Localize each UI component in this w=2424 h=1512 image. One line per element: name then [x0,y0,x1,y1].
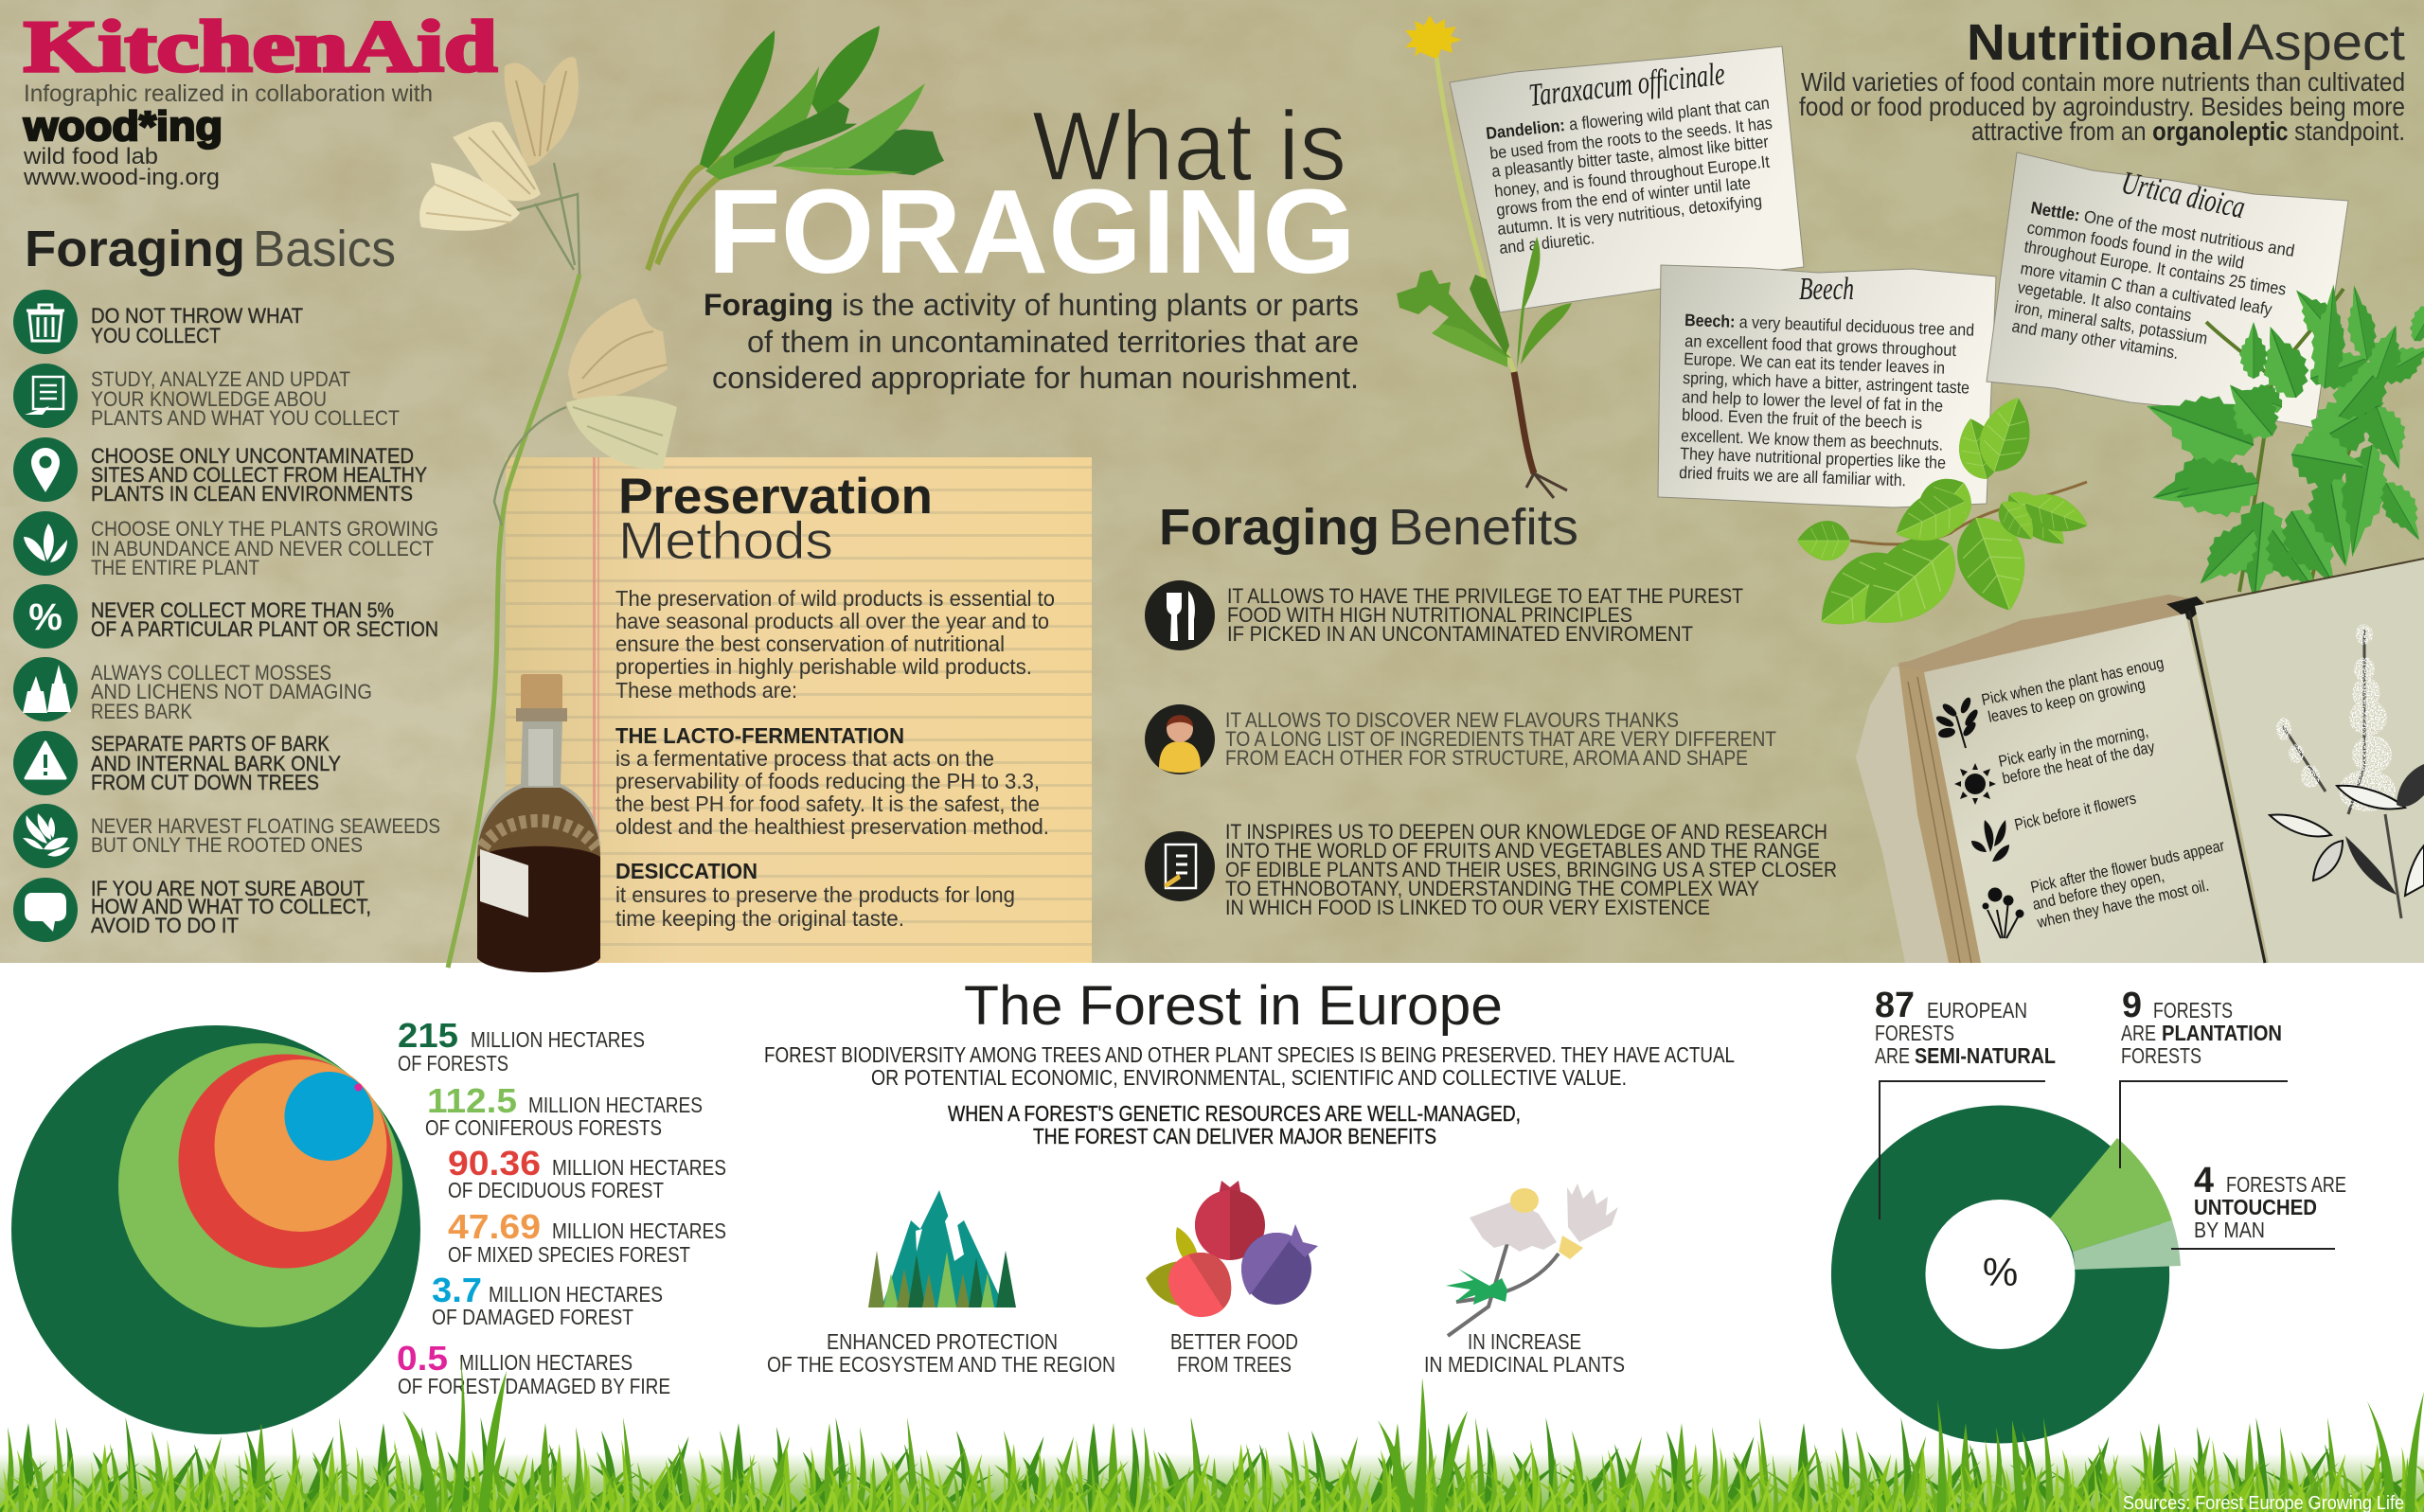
collaboration credit: www.wood-ing.org [23,165,220,190]
donut label: 9: 9 [2122,986,2142,1025]
rule 1: DO NOT THROW WHAT [91,304,303,328]
donut label: 9: FORESTS [2121,1043,2201,1068]
label: 47.69: 47.69 [448,1207,541,1246]
label: 112.5: OF CONIFEROUS FORESTS [425,1115,662,1140]
text: forest intro: WHEN A FOREST'S GENETIC RESOURCES ARE WELL-MANAGED, [948,1101,1521,1126]
icon: map pin [13,437,78,502]
icon: book sun [1954,763,1996,805]
icon: trash bin [13,290,78,354]
icon: seaweed [13,804,78,868]
foraging basics list [13,290,440,942]
label: 90.36: 90.36 [448,1144,541,1183]
icon: mountains and trees [868,1190,1016,1307]
card: Beech: an excellent food that grows throughout [1684,331,1956,360]
label: 3.7 [432,1271,663,1329]
card: Taraxacum officinale: autumn. It is very nutritious, detoxifying [1496,191,1763,239]
card: Taraxacum officinale: a pleasantly bitter taste, almost like bitter [1490,132,1770,181]
rule 8: NEVER HARVEST FLOATING SEAWEEDS [91,814,440,838]
book tip lines: leaves to keep on growing [1987,675,2147,726]
donut chart [1831,1105,2181,1443]
heading: Foraging Benefits [1159,499,1578,556]
label: 0.5: MILLION HECTARES [459,1350,633,1375]
plant: green sprig [648,26,944,270]
donut label: 9 [2120,986,2288,1168]
text: preservation body: The preservation of wild products is essential to [615,586,1055,611]
donut label: 87: 87 [1875,986,1915,1025]
benefit 1 [1227,584,1743,646]
text: forest intro [764,1042,1735,1148]
heading: Preservation Methods [618,469,933,570]
label: 3.7: OF DAMAGED FOREST [432,1305,633,1329]
card: Urtica dioica: common foods found in the wild [2025,218,2245,273]
card: Urtica dioica: vegetable. It also contains [2016,277,2193,325]
benefit 3 [1225,820,1837,919]
rule 5: NEVER COLLECT MORE THAN 5% [91,598,394,622]
heading: Foraging Benefits: Benefits [1388,499,1578,556]
heading: Foraging Benefits: Foraging [1159,499,1380,556]
text: forest intro: OR POTENTIAL ECONOMIC, ENVIRONMENTAL, SCIENTIFIC AND COLLECTIVE VALUE. [871,1065,1627,1090]
card: Urtica dioica: Nettle: One of the most nutritious and [2029,198,2296,260]
plant: nettle [2135,279,2424,605]
heading: Foraging Basics [25,221,396,277]
rule 6: AND LICHENS NOT DAMAGING [91,680,372,703]
card: Beech: Beech [1799,272,1854,307]
card: Beech: spring, which have a bitter, astringent taste [1683,368,1970,398]
benefit 3: IN WHICH FOOD IS LINKED TO OUR VERY EXISTENCE [1225,896,1710,919]
label: 0.5 [397,1339,670,1398]
title: FORAGING [707,165,1356,298]
label: 0.5: OF FOREST DAMAGED BY FIRE [398,1374,670,1398]
rule 3 [91,444,427,506]
captions: forest benefits: BETTER FOOD [1170,1329,1298,1354]
text: preservation body: ensure the best conservation of nutritional [615,631,1005,656]
rule 6: REES BARK [91,700,192,723]
donut chart: % [1983,1250,2018,1294]
image: open book [1856,559,2424,963]
card: Taraxacum officinale: Dandelion: a flowering wild plant that can [1485,94,1771,143]
card: Beech: Europe. We can eat its tender leaves in [1684,349,1945,378]
panel: notebook paper [506,457,1092,963]
icon: fruits [1146,1181,1318,1317]
icon: notes [13,364,78,428]
rule 5: OF A PARTICULAR PLANT OR SECTION [91,617,438,641]
paper background [0,0,2424,963]
icon: warning [13,731,78,795]
label: 0.5: 0.5 [397,1339,448,1378]
rule 8: BUT ONLY THE ROOTED ONES [91,833,363,857]
grass border [0,1356,2424,1512]
label: 112.5: MILLION HECTARES [528,1093,703,1117]
card: Beech: blood. Even the fruit of the beech is [1682,405,1922,433]
rule 8 [91,814,440,857]
text: preservation body: it ensures to preserve the products for long [615,882,1015,907]
text: preservation body: THE LACTO-FERMENTATION [615,723,904,748]
benefit 3: IT INSPIRES US TO DEEPEN OUR KNOWLEDGE OF AND RESEARCH [1225,820,1827,844]
card: Urtica dioica: more vitamin C than a cultivated leafy [2019,258,2273,319]
rule 9 [91,877,371,937]
donut label: 4: FORESTS ARE [2226,1172,2346,1197]
rule 9: HOW AND WHAT TO COLLECT, [91,895,371,918]
rule 4: IN ABUNDANCE AND NEVER COLLECT [91,537,434,560]
collaboration credit: Infographic realized in collaboration with [24,80,433,107]
card: Taraxacum officinale: grows from the end of winter until late [1495,173,1752,220]
heading: Foraging Basics: Basics [253,221,396,277]
icon: percent: % [28,596,62,638]
text: preservation body: These methods are: [615,678,797,703]
label: 112.5: 112.5 [427,1081,517,1120]
benefit 1: IF PICKED IN AN UNCONTAMINATED ENVIROMENT [1227,622,1693,646]
donut label: 9: PLANTATION [2162,1021,2282,1045]
rule 9: AVOID TO DO IT [91,914,239,937]
card: Taraxacum officinale: and a diuretic. [1498,228,1595,258]
card: Beech: dried fruits we are all familiar with. [1679,463,1906,489]
benefits list [1145,580,1837,919]
icon: person [1145,704,1215,774]
rule 7 [91,732,341,794]
rule 4: CHOOSE ONLY THE PLANTS GROWING [91,517,438,541]
collaboration credit [23,80,433,190]
captions: forest benefits: FROM TREES [1177,1352,1292,1377]
captions: forest benefits: ENHANCED PROTECTION [827,1329,1058,1354]
donut label: 87: ARE [1875,1043,1910,1068]
text: preservation body: time keeping the original taste. [615,906,904,931]
heading: Nutritional Aspect [1967,14,2405,71]
text: definition: of them in uncontaminated territories that are [747,325,1359,359]
book tip lines: when they have the most oil. [2035,877,2211,932]
collaboration credit: wild food lab [23,144,158,169]
donut label: 4: UNTOUCHED [2194,1195,2317,1219]
text: preservation body: DESICCATION [615,859,758,883]
card: Taraxacum officinale: Taraxacum officinale [1527,57,1727,114]
rule 2: YOUR KNOWLEDGE ABOU [91,387,327,411]
icon: fork and knife [1145,580,1215,650]
KitchenAid logo: KitchenAid [24,6,497,87]
label: 112.5 [425,1081,703,1140]
label: 90.36: OF DECIDUOUS FOREST [448,1178,664,1202]
rule 6 [91,661,372,723]
text: preservation body: preservability of foods reducing the PH to 3.3, [615,769,1040,793]
icon: percent [13,584,78,649]
donut label: 4: 4 [2194,1161,2214,1201]
donut label: 4: BY MAN [2194,1218,2265,1242]
donut label: 4 [2171,1161,2346,1249]
rule 6: ALWAYS COLLECT MOSSES [91,661,331,685]
card: Beech: They have nutritional properties like the [1680,444,1946,472]
text: preservation body: oldest and the healthiest preservation method. [615,814,1049,839]
rule 3: PLANTS IN CLEAN ENVIRONMENTS [91,482,413,506]
donut label: 87: SEMI-NATURAL [1915,1043,2056,1068]
benefit 2 [1225,708,1776,770]
card: Taraxacum officinale: honey, and is found throughout Europe.It [1493,152,1771,201]
benefit 2: FROM EACH OTHER FOR STRUCTURE, AROMA AND SHAPE [1225,746,1748,770]
label: 47.69 [448,1207,726,1267]
card: Urtica dioica: Urtica dioica [2118,166,2248,225]
text: definition: considered appropriate for human nourishment. [712,361,1359,395]
book tip lines: Pick before it flowers [2013,790,2138,834]
card: Taraxacum officinale [1450,46,1804,312]
label: 215: OF FORESTS [398,1051,508,1076]
heading: Foraging Basics: Foraging [25,221,245,277]
donut label: 87 [1875,986,2056,1219]
rule 1 [91,304,303,347]
title [707,92,1356,298]
text: definition [704,288,1359,395]
rule 4: THE ENTIRE PLANT [91,556,259,579]
captions: forest benefits: IN MEDICINAL PLANTS [1424,1352,1625,1377]
donut label: 9: ARE [2121,1021,2156,1045]
plant: dandelion [1397,15,1572,498]
benefit 3: TO ETHNOBOTANY, UNDERSTANDING THE COMPLEX WAY [1225,877,1759,900]
plant: dried flowers [419,57,677,968]
bubble chart: forests [11,1025,420,1434]
plant: beech branch [1797,390,2094,648]
card: Beech: excellent. We know them as beechnuts. [1681,426,1943,454]
label: 90.36: MILLION HECTARES [552,1155,726,1180]
rule 2 [91,367,400,430]
rule 7: FROM CUT DOWN TREES [91,771,319,794]
icon: document [1145,831,1215,901]
benefit 3: OF EDIBLE PLANTS AND THEIR USES, BRINGING US A STEP CLOSER [1225,858,1837,881]
rule 1: YOU COLLECT [91,324,221,347]
heading: Preservation Methods: Methods [618,510,833,570]
book tip lines: Pick when the plant has enoug [1980,654,2166,709]
rule 7: SEPARATE PARTS OF BARK [91,732,330,756]
card: Beech [1658,265,1996,507]
card: Beech: Beech: a very beautiful deciduous tree and [1684,311,1974,340]
heading: The Forest in Europe: The Forest in Europe [964,975,1503,1037]
benefit 1: IT ALLOWS TO HAVE THE PRIVILEGE TO EAT THE PUREST [1227,584,1743,608]
donut label: 9: FORESTS [2153,998,2233,1023]
captions: forest benefits: IN INCREASE [1468,1329,1581,1354]
captions: forest benefits: OF THE ECOSYSTEM AND THE REGION [767,1352,1115,1377]
label: 215 [398,1016,645,1076]
rule 2: STUDY, ANALYZE AND UPDAT [91,367,350,391]
book tip lines [1980,654,2226,932]
title: What is [1032,92,1346,202]
label: 215: 215 [398,1016,458,1055]
text: forest intro: FOREST BIODIVERSITY AMONG TREES AND OTHER PLANT SPECIES IS BEING PRESERVED. THEY HAVE ACTUAL [764,1042,1735,1067]
heading: Nutritional Aspect: Aspect [2237,14,2405,71]
white lower section [0,963,2424,1512]
rule 9: IF YOU ARE NOT SURE ABOUT [91,877,365,900]
donut label: 87: FORESTS [1875,1021,1954,1045]
text: preservation body: properties in highly perishable wild products. [615,654,1032,679]
image: oil bottle [477,674,600,972]
text: nutritional intro [1799,67,2405,146]
rule 2: PLANTS AND WHAT YOU COLLECT [91,406,400,430]
heading: Preservation Methods: Preservation [618,469,933,525]
benefit 3: INTO THE WORLD OF FRUITS AND VEGETABLES AND THE RANGE [1225,839,1820,863]
captions: forest benefits [767,1329,1625,1377]
icon: trees [13,657,78,721]
text: preservation body: is a fermentative process that acts on the [615,746,994,771]
label: 47.69: MILLION HECTARES [552,1218,726,1243]
donut label: 87: EUROPEAN [1927,998,2027,1023]
icon: book flower buds [1983,888,2023,938]
label: 3.7: MILLION HECTARES [489,1282,663,1307]
label: 215: MILLION HECTARES [471,1027,645,1052]
bubble chart labels [397,1016,726,1398]
rule 5 [91,598,438,641]
card: Urtica dioica: iron, mineral salts, potassium [2013,297,2209,348]
label: 90.36 [448,1144,726,1202]
illustration: engraved plant [2270,624,2424,918]
book tip lines: before the heat of the day [2001,738,2157,788]
heading: Nutritional Aspect: Nutritional [1967,14,2235,71]
icon: speech bubble [13,878,78,942]
card: Urtica dioica: throughout Europe. It contains 25 times [2023,237,2288,299]
collaboration credit: wood*ing [23,103,223,150]
text: preservation body [615,586,1055,931]
book tip lines: Pick early in the morning, [1997,722,2149,771]
benefit 2: TO A LONG LIST OF INGREDIENTS THAT ARE VERY DIFFERENT [1225,727,1776,751]
text: nutritional intro: attractive from an organoleptic standpoint. [1971,116,2405,146]
card: Beech: and help to lower the level of fat in the [1682,387,1943,416]
rule 7: AND INTERNAL BARK ONLY [91,752,341,775]
card: Urtica dioica: and many other vitamins. [2010,316,2180,363]
text: preservation body: have seasonal products all over the year and to [615,609,1049,633]
book tip lines: and before they open, [2031,867,2166,914]
label: 3.7: 3.7 [432,1271,482,1309]
benefit 2: IT ALLOWS TO DISCOVER NEW FLAVOURS THANKS [1225,708,1679,732]
card: Taraxacum officinale: be used from the roots to the seeds. It has [1488,114,1773,163]
rule 3: CHOOSE ONLY UNCONTAMINATED [91,444,414,468]
icon: book leaves [1971,820,2009,862]
card: Urtica dioica [1987,152,2348,428]
text: preservation body: the best PH for food safety. It is the safest, the [615,792,1040,816]
icon: leaves [13,511,78,576]
icon: book sprig [1934,696,1980,748]
benefit 1: FOOD WITH HIGH NUTRITIONAL PRINCIPLES [1227,603,1632,627]
label: 47.69: OF MIXED SPECIES FOREST [448,1242,690,1267]
rule 3: SITES AND COLLECT FROM HEALTHY [91,463,427,487]
icon: medicinal flowers [1446,1183,1618,1336]
book tip lines: Pick after the flower buds appear [2029,836,2226,897]
rule 4 [91,517,438,579]
text: definition: Foraging is the activity of hunting plants or parts [704,288,1359,322]
text: forest intro: THE FOREST CAN DELIVER MAJOR BENEFITS [1033,1124,1436,1148]
